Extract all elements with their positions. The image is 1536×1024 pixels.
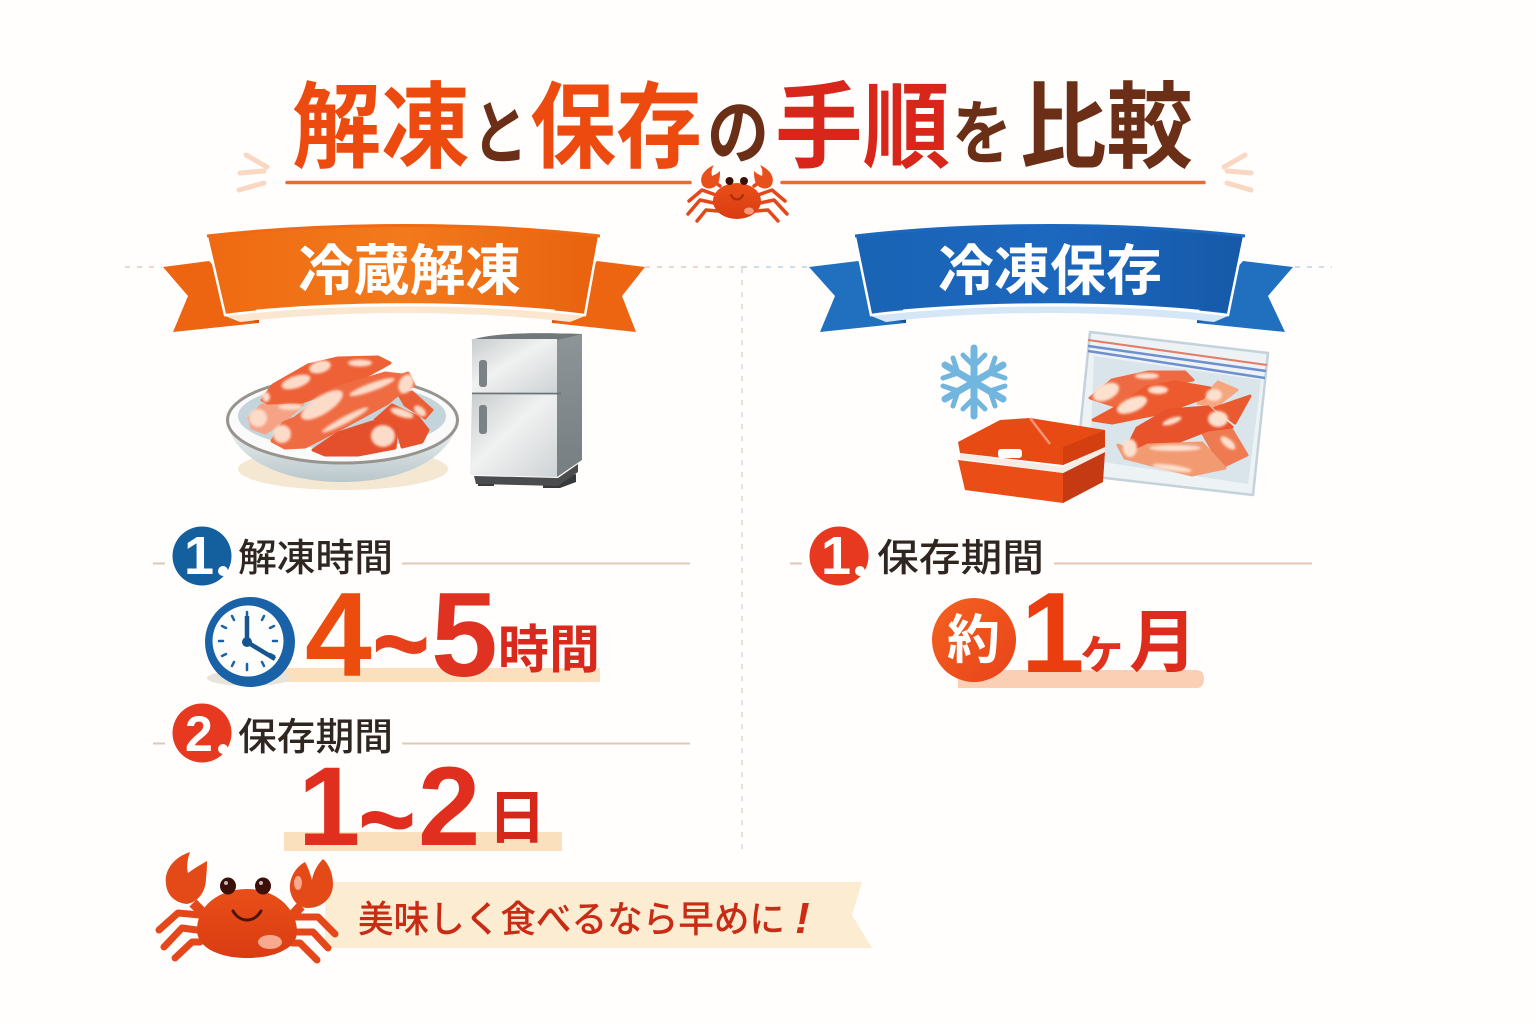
title: 比較 xyxy=(1020,75,1193,180)
title divider with sparkles xyxy=(239,155,1251,190)
illustration: plate of crab sticks xyxy=(227,357,458,490)
title: 手順 xyxy=(775,75,950,180)
label text: 解凍時間 xyxy=(238,538,393,580)
value: 4~5時間: ~ xyxy=(372,576,430,710)
value: 約1ヶ月: 1 xyxy=(1021,570,1084,697)
illustration: red storage box xyxy=(958,418,1105,503)
ribbon: 冷蔵解凍 xyxy=(163,226,645,332)
icon: snowflake xyxy=(943,348,1005,416)
title: 保存 xyxy=(530,75,702,180)
value: 4~5時間 xyxy=(305,568,600,710)
value: 1~2日: ~ xyxy=(358,753,416,885)
title: 解凍 xyxy=(292,75,470,180)
value highlight bar xyxy=(270,668,600,682)
value highlight bar xyxy=(958,670,1204,688)
value: 1~2日 xyxy=(298,744,546,885)
panel: 保存期間 heading xyxy=(153,704,690,762)
value: 4~5時間: 5 xyxy=(431,568,498,702)
value: 4~5時間: 4 xyxy=(305,568,372,702)
value: 4~5時間: 時間 xyxy=(498,622,600,680)
icon: small crab on title divider xyxy=(688,165,787,221)
callout banner xyxy=(325,882,872,948)
panel: 保存期間 heading (freezer) xyxy=(790,526,1312,586)
label text: 保存期間 xyxy=(877,538,1044,580)
dashed separators xyxy=(125,267,1332,852)
value highlight bar xyxy=(284,832,562,851)
callout banner: ! xyxy=(795,894,810,943)
number badge 2 xyxy=(172,704,232,762)
value: 1~2日: 1 xyxy=(298,744,360,869)
title: の xyxy=(707,94,769,174)
badge: 約: 約 xyxy=(947,611,1000,670)
illustration: freezer bag with crab sticks xyxy=(1076,332,1268,495)
ribbon heading text: 冷蔵解凍 xyxy=(298,240,521,302)
ribbon heading text: 冷凍保存 xyxy=(938,240,1162,302)
title: を xyxy=(952,95,1012,173)
badge: 約 xyxy=(932,598,1016,682)
value: 1~2日: 日 xyxy=(488,786,546,851)
title xyxy=(292,75,1193,180)
icon: crab mascot xyxy=(159,852,335,960)
title: と xyxy=(472,95,528,173)
number badge 2: 2 xyxy=(185,706,213,762)
value: 1~2日: 2 xyxy=(418,744,480,869)
illustration: refrigerator xyxy=(470,333,582,488)
number badge 1 xyxy=(172,526,232,586)
value: 約1ヶ月 xyxy=(1021,570,1197,697)
callout banner: 美味しく食べるなら早めに xyxy=(358,899,785,940)
icon: clock xyxy=(205,597,295,687)
value: 約1ヶ月: 月 xyxy=(1129,605,1197,681)
number badge 1 xyxy=(810,526,868,586)
label text: 保存期間 xyxy=(238,717,393,759)
value: 約1ヶ月: ヶ xyxy=(1077,622,1127,678)
ribbon: 冷凍保存 xyxy=(809,226,1293,332)
number badge 1: 1 xyxy=(184,526,214,586)
panel: 解凍時間 heading xyxy=(153,526,690,586)
number badge 1: 1 xyxy=(821,526,851,586)
